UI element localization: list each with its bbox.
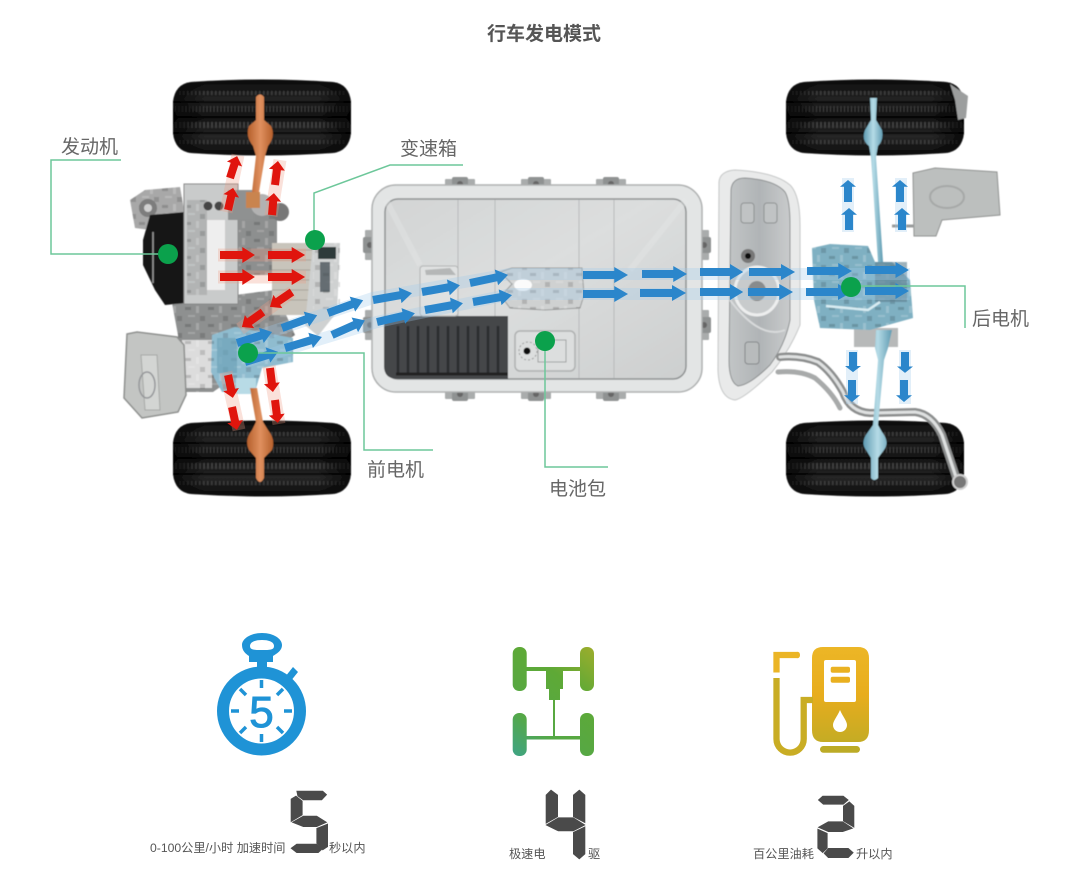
callout: gearbox (305, 138, 463, 250)
digit 4 (546, 790, 585, 859)
blue arrows: electric flow (235, 180, 913, 402)
icon: fuel pump (776, 647, 869, 753)
callout: engine (51, 136, 178, 264)
tire: rear left (786, 80, 964, 156)
callout: front motor: 前电机 (367, 459, 424, 481)
battery pack (363, 177, 711, 401)
engine: accessory and block (130, 184, 289, 305)
stat: fuel consumption: 百公里油耗 (753, 847, 814, 861)
front motor (211, 327, 293, 394)
icon: stopwatch (223, 633, 300, 750)
junction box (420, 266, 458, 316)
transmission (272, 243, 340, 336)
callout: rear motor (841, 277, 1029, 330)
icon: stopwatch: 5 (249, 688, 274, 737)
digit 5 (291, 791, 328, 853)
panel seams (458, 200, 614, 378)
callout: battery pack (535, 331, 608, 500)
fuel tank (718, 170, 800, 400)
tire: front right (173, 420, 351, 496)
title: 行车发电模式 (487, 22, 601, 45)
callout: gearbox: 变速箱 (400, 138, 457, 160)
stat: four wheel drive (509, 790, 600, 861)
stat: acceleration (150, 791, 366, 855)
stat: acceleration: 0-100公里/小时 加速时间 (150, 841, 285, 855)
tire: rear right (786, 420, 964, 496)
exposed cell module (384, 316, 508, 379)
stat: fuel consumption: 升以内 (856, 847, 893, 861)
rear driveshaft bottom (863, 330, 892, 480)
red arrows: engine output (220, 154, 305, 432)
high voltage unit (500, 268, 584, 310)
callout: rear motor: 后电机 (972, 308, 1029, 330)
icon: four wheel drive (513, 647, 594, 756)
stat: acceleration: 秒以内 (329, 841, 366, 855)
stat: four wheel drive: 极速电 (509, 847, 546, 861)
callout: battery pack: 电池包 (549, 478, 606, 500)
service plate (515, 331, 575, 371)
energy flow trails (218, 155, 910, 430)
front driveshaft bottom (247, 388, 273, 482)
front mechanical mass (172, 290, 295, 392)
digit 2 (818, 796, 854, 858)
stat: fuel consumption (753, 796, 893, 861)
exhaust pipe (778, 357, 967, 489)
rear inverter (892, 168, 1000, 236)
tire: front left (173, 80, 351, 156)
rear tire bracket (950, 84, 968, 120)
chassis illustration (124, 80, 1000, 496)
callout: front motor (238, 343, 433, 481)
stat: four wheel drive: 驱 (588, 847, 600, 861)
front inverter (124, 332, 186, 418)
rear motor (812, 244, 913, 347)
callout: engine: 发动机 (61, 136, 118, 158)
rear driveshaft top (864, 98, 883, 262)
front driveshaft top (246, 94, 273, 208)
